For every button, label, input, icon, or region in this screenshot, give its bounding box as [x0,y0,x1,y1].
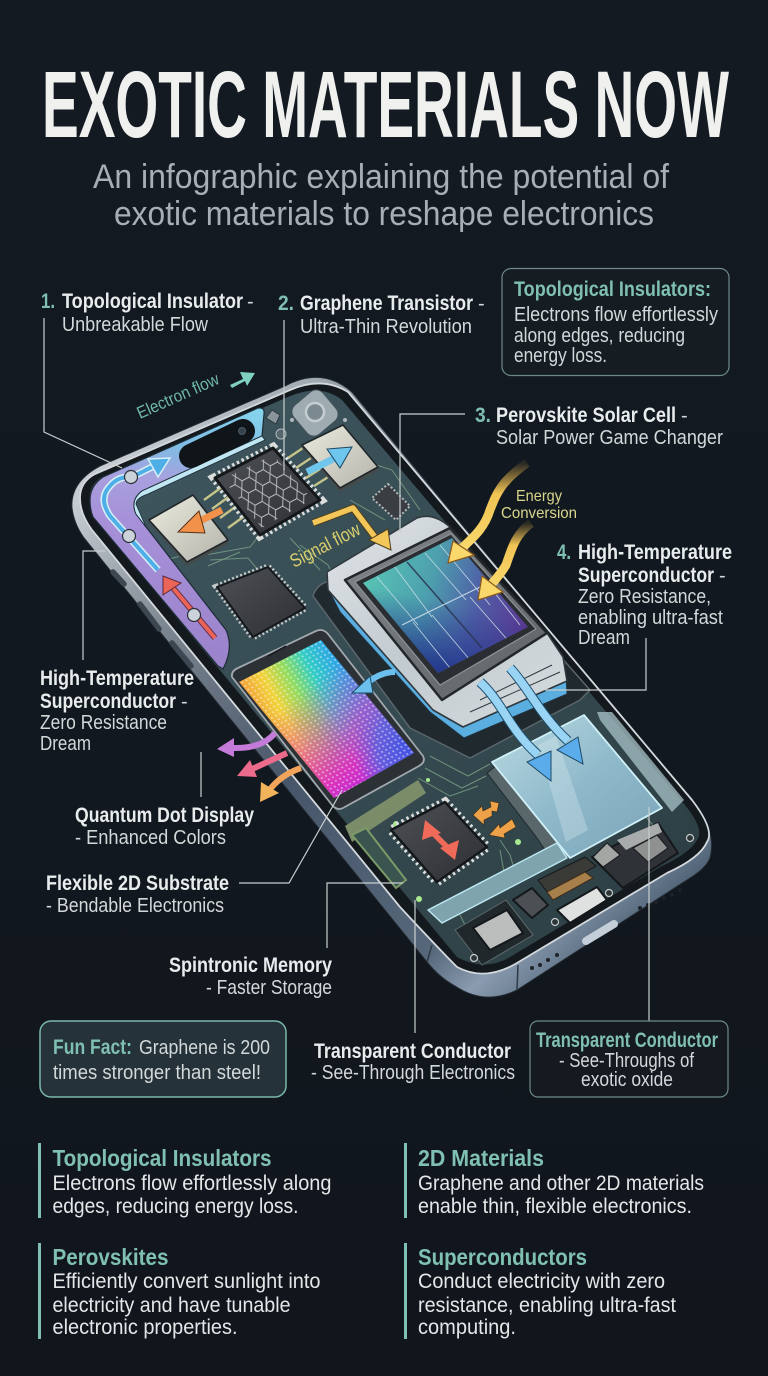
circuit board [90,391,699,964]
label 3: perovskite solar cell: Perovskite Solar Cell [496,404,676,427]
callout: fun fact: Fun Fact: [53,1036,132,1059]
label 1: topological insulator: 1. [41,290,55,313]
traces [160,455,670,955]
summary: perovskites: electronic properties. [52,1316,238,1339]
callout box: topological insulators [502,268,729,376]
label: flexible 2d substrate [46,872,229,917]
camera pill [191,431,243,456]
electrons [122,470,200,622]
label 1: topological insulator: - [247,291,254,313]
label 2: graphene transistor: Ultra-Thin Revolution [300,316,472,338]
right square component [288,425,378,492]
bottom components [455,823,678,965]
callout box: topological insulators: along edges, reducing [514,325,685,347]
bottom seam [427,945,518,990]
summary: perovskites: Perovskites [52,1244,168,1270]
camera module [266,386,347,440]
energy conversion label [501,488,577,522]
summary: perovskites: Efficiently convert sunlight into [52,1270,320,1293]
summary: 2d materials: 2D Materials [418,1145,544,1171]
edge flow arrow [104,458,170,570]
summary: superconductors: resistance, enabling ultra-fast [418,1294,676,1317]
label: high-temperature superconductor left [40,667,194,755]
label: high-temperature superconductor left: - [181,691,188,713]
signal flow label: Signal flow [287,519,364,572]
callout box: transparent conductor: - See-Throughs of [559,1050,694,1072]
energy conversion arrows [448,463,531,600]
phone cutaway illustration [72,377,712,997]
small chip [372,484,410,520]
callout box: transparent conductor: exotic oxide [581,1069,673,1091]
subtitle [93,158,670,233]
perovskite cell stack [313,516,590,758]
solar frame [345,528,547,700]
callout box: topological insulators: Topological Insulators: [514,278,711,301]
label 1: topological insulator: Unbreakable Flow [62,314,208,336]
label 4: high-temperature superconductor: High-Temperature [578,541,732,564]
icon: electron flow arrow [230,372,255,388]
label 4: high-temperature superconductor: enabling ultra-fast [578,607,723,629]
summary: superconductors: Conduct electricity with zero [418,1270,665,1293]
label 4: high-temperature superconductor: - [719,565,726,587]
label 2: graphene transistor: 2. [278,292,294,315]
graphene transistor chip [200,440,330,540]
callout: fun fact [40,1021,286,1097]
spintronic memory chip [391,802,487,882]
summary: topological insulators [38,1143,332,1218]
label 4: high-temperature superconductor: Superconductor [578,564,714,587]
screws [470,834,694,962]
band bevel [134,436,265,527]
summary: superconductors: computing. [418,1316,516,1339]
label 2: graphene transistor: - [478,293,485,315]
label 3: perovskite solar cell [475,404,723,449]
silver layer [327,516,567,727]
callout box: transparent conductor [530,1021,728,1097]
label 4: high-temperature superconductor: Zero Resistance, [578,586,711,608]
label: quantum dot display: Quantum Dot Display [75,804,254,827]
emission arrows [217,733,301,802]
label 1: topological insulator: Topological Insulator [62,290,243,313]
label: high-temperature superconductor left: Zero Resistance [40,712,167,734]
label 3: perovskite solar cell: - [681,405,688,427]
label: spintronic memory: Spintronic Memory [169,954,332,977]
topological insulator band [90,408,264,669]
charging port [586,924,614,941]
callout leader lines [44,318,649,1033]
subtitle: An infographic explaining the potential of [93,158,670,196]
label: spintronic memory: - Faster Storage [206,977,332,999]
electron flow label: Electron flow [134,369,223,423]
label 4: high-temperature superconductor: 4. [557,541,571,564]
summary: perovskites [38,1243,320,1339]
bezel [80,383,709,974]
spin arrows [473,801,516,838]
summary: superconductors [404,1243,676,1339]
label 1: topological insulator [41,290,254,336]
energy conversion label: Conversion [501,505,577,522]
left square component [149,484,250,566]
label: flexible 2d substrate: Flexible 2D Substrate [46,872,229,895]
summary: 2d materials: Graphene and other 2D materials [418,1172,704,1195]
label 4: high-temperature superconductor: Dream [578,627,630,649]
transparent conductor glass [428,712,684,923]
green connector [345,780,426,842]
summary: topological insulators: Topological Insulators [52,1145,272,1171]
callout box: transparent conductor: Transparent Conductor [536,1029,718,1052]
status dots [393,778,521,902]
label: quantum dot display: - Enhanced Colors [75,827,226,849]
quantum dot display [230,630,425,809]
summary: topological insulators: edges, reducing energy loss. [52,1195,298,1218]
speaker holes [530,888,682,970]
reverse flow arrow [163,576,215,638]
summary: perovskites: electricity and have tunable [52,1294,290,1317]
label: transparent conductor: Transparent Conductor [314,1040,511,1063]
label: spintronic memory [169,954,332,999]
energy conversion label: Energy [516,488,562,505]
label 2: graphene transistor: Graphene Transistor [300,292,473,315]
label: transparent conductor: - See-Through Electronics [311,1062,515,1084]
callout: fun fact: Graphene is 200 [139,1037,270,1059]
label: quantum dot display [75,804,254,849]
label 4: high-temperature superconductor [557,541,732,649]
downward flow arrows [480,668,583,781]
summary: 2d materials [404,1143,704,1218]
label: high-temperature superconductor left: Superconductor [40,690,176,713]
label: high-temperature superconductor left: High-Temperature [40,667,194,690]
phone body [72,377,712,997]
heat flow arrow to display [352,672,395,693]
label 3: perovskite solar cell: 3. [475,404,491,427]
summary: topological insulators: Electrons flow effortlessly along [52,1172,332,1195]
callout box: topological insulators: energy loss. [514,345,607,367]
label: flexible 2d substrate: - Bendable Electronics [46,895,224,917]
stack recess [313,520,590,758]
blue layer [326,560,567,738]
camera lens [238,428,246,434]
dark processor chip [217,567,305,637]
label 2: graphene transistor [278,292,485,338]
label 3: perovskite solar cell: Solar Power Game Changer [496,427,723,449]
callout: fun fact: times stronger than steel! [53,1062,261,1084]
summary: 2d materials: enable thin, flexible electronics. [418,1195,692,1218]
signal flow arrow [313,508,391,550]
summary: superconductors: Superconductors [418,1244,587,1270]
side buttons [113,572,191,666]
label: high-temperature superconductor left: Dream [40,733,91,755]
label: transparent conductor [311,1040,515,1084]
solar cell [363,538,528,673]
callout box: topological insulators: Electrons flow effortlessly [514,304,718,326]
subtitle: exotic materials to reshape electronics [114,195,654,233]
